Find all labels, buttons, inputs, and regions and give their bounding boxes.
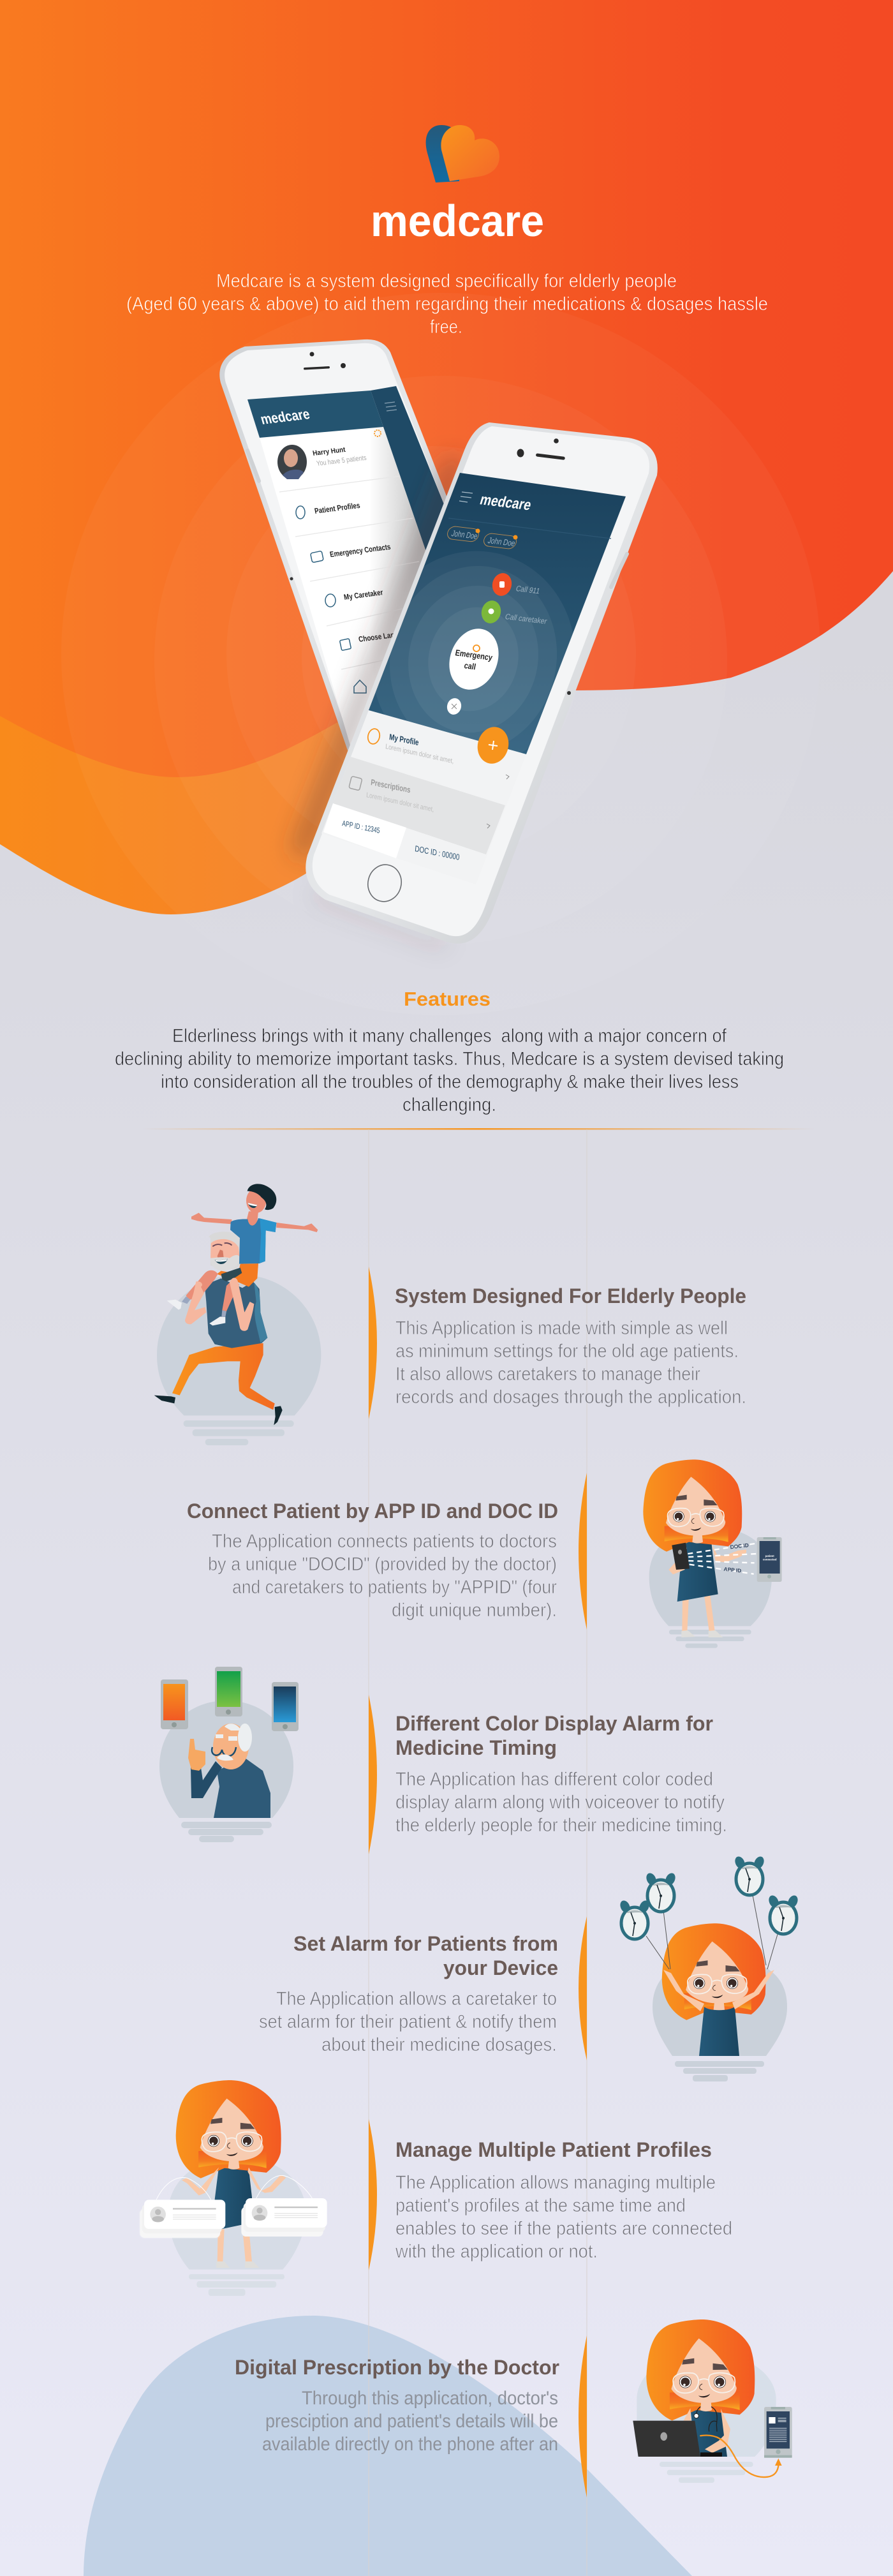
prescriptions row: Prescriptions [371,777,411,794]
alarm clock 2 [644,1872,677,1912]
child back sock and shoe [167,1297,190,1310]
right profile cards [241,2198,327,2237]
feature 5 body: with the application or not. [395,2241,598,2262]
back phone orange badge [374,430,381,436]
raised arms [663,1970,774,2011]
feature 5 body: enables to see if the patients are connected [395,2218,732,2239]
alarm clock 3 [733,1855,766,1895]
child neck [247,1211,258,1227]
back phone menu icons [296,506,366,693]
concentric background rings [61,293,820,1015]
front phone header divider [448,518,611,539]
legs and shoes [681,1595,723,1637]
doc id label: DOC ID : 00000 [415,844,460,862]
front phone camera and speaker [517,438,565,460]
alarm clock 4 [767,1894,800,1934]
body [214,1758,270,1818]
phone [764,2407,792,2458]
target phone: patient [765,1554,774,1558]
app id label: APP ID [723,1566,742,1574]
man legs [172,1343,275,1410]
intro text: Medcare is a system designed specifically for elderly people [216,271,677,292]
intro text: free. [430,316,462,338]
front phone grey row [333,757,505,854]
feature 1 body: It also allows caretakers to manage their [395,1364,700,1385]
feature 5 illustration: girl with profile cards [140,2080,327,2296]
prescriptions row: Lorem ipsum dolor sit amet, [366,791,434,814]
man right arm [230,1277,254,1331]
bulb base [189,2274,284,2296]
feature 4 body [259,1988,557,2055]
feature 3 body: the elderly people for their medicine timing. [395,1815,727,1836]
header: gold wave [0,702,383,914]
my profile row: Lorem ipsum dolor sit amet, [385,743,454,765]
my profile row [366,727,454,765]
features paragraph: Elderliness brings with it many challenges along with a major concern of [172,1025,727,1046]
back phone side button [247,450,259,481]
front phone side button [611,554,627,587]
arrow [700,2435,782,2477]
my profile row: My Profile [389,732,419,747]
bulb backdrop [168,2157,306,2270]
prescriptions row [349,776,434,814]
front phone remaining screen [321,710,526,884]
bulb base [675,2061,764,2081]
feature 3 heading: Medicine Timing [395,1736,557,1759]
child front leg [222,1278,239,1311]
stethoscope [694,2407,717,2432]
dress [699,2007,739,2056]
back phone menu labels: My Caretaker [343,588,384,602]
back phone menu labels: Emergency Contacts [329,542,392,559]
bulb backdrop [159,1701,293,1818]
feature 3 body: The Application has different color coded [395,1769,713,1790]
orange divider [142,1128,815,1129]
left shoulder [684,2408,691,2420]
target phone [757,1537,782,1582]
back phone wordmark: medcare [259,406,311,428]
child back leg [186,1270,218,1300]
emergency call button [441,622,507,697]
left profile cards [140,2200,225,2238]
emergency call button: Emergency [454,648,494,662]
features paragraph: declining ability to memorize important tasks. Thus, Medcare is a system devised taking [115,1048,784,1069]
back phone header [247,391,383,438]
front phone dark screen [369,473,626,754]
front phone patient pills [446,526,518,549]
row chevrons [487,775,509,828]
feature 6 heading: Digital Prescription by the Doctor [235,2356,559,2379]
legs and shoes [216,2227,260,2268]
header: orange gradient shape [0,0,893,777]
feature 4 heading: Set Alarm for Patients from [293,1932,558,1955]
front phone patient pills: John Doe [487,535,517,548]
blue phone [272,1682,299,1731]
feature 2 body [208,1531,557,1621]
bulb base [669,1630,751,1648]
feature 6 body: presciption and patient's details will be [265,2411,558,2432]
head [176,2080,281,2178]
back phone [219,339,459,759]
back phone camera and speaker [304,352,346,370]
feature 2 illustration: girl connecting phones [643,1459,782,1648]
child orange shorts [217,1263,258,1287]
feature 5 body [395,2172,732,2262]
alarm clock 1 [618,1899,651,1939]
feature 2 body: by a unique "DOCID" (provided by the doctor) [208,1554,557,1575]
feature 1 body: as minimum settings for the old age patients. [395,1341,739,1362]
vertical timeline lines [369,1129,587,2576]
feature 1 body [395,1318,746,1408]
strings [156,2175,312,2200]
feature 2 body: and caretakers to patients by "APPID" (four [232,1577,557,1598]
back phone hamburger [385,402,397,411]
feature 3 illustration: old man with phones [159,1667,299,1842]
call caretaker button [479,599,548,626]
dress [690,2407,727,2457]
front phone side dot [567,691,571,695]
front phone [306,422,658,944]
back phone side dot [290,577,293,581]
feature 2 heading: Connect Patient by APP ID and DOC ID [187,1500,558,1523]
feature 4 illustration: girl with alarm clocks [618,1855,800,2081]
bulb backdrop [157,1274,321,1415]
bulb base [184,1420,294,1445]
right arm [712,1544,746,1562]
feature 1 body: This Application is made with simple as well [395,1318,728,1339]
call 911 button: Call 911 [515,584,541,595]
close button [445,697,463,716]
feature 1 body: records and dosages through the application. [395,1387,746,1408]
head [643,1459,742,1552]
head [212,1724,252,1769]
back phone menu labels: Patient Profiles [314,501,361,516]
feature 6 illustration: doctor with laptop and phone [633,2319,792,2483]
child arms [191,1213,318,1232]
man head [209,1232,244,1281]
dress [677,1540,718,1602]
title: medcare [371,196,544,246]
app id label: APP ID : 12345 [342,819,380,835]
back phone profile text: Harry Hunt [312,446,346,458]
front phone patient pills: John Doe [450,528,479,541]
feature 4 heading: your Device [443,1956,558,1979]
arms [182,2168,286,2196]
feature 2 body: digit unique number). [392,1600,557,1621]
held device [672,1543,690,1570]
arm [705,2409,730,2453]
front phone pulse rings [376,551,573,753]
call 911 button [490,571,541,598]
bulb backdrop [653,1958,787,2056]
features paragraph: into consideration all the troubles of the demography & make their lives less [161,1071,739,1092]
green phone [215,1667,242,1716]
shadow of front phone [300,459,456,944]
child shirt side [260,1218,276,1263]
feature 1 heading: System Designed For Elderly People [395,1284,746,1307]
left arm [668,1560,686,1574]
feature 2 body: The Application connects patients to doctors [212,1531,557,1552]
feature 3 body [395,1769,727,1836]
hand [188,1739,205,1771]
bulb base [181,1822,272,1842]
child shirt [230,1218,276,1264]
feature 3 heading [395,1712,713,1759]
back phone: You have 5 patients [316,454,367,468]
feature 4 heading [293,1932,558,1979]
feature 5 body: patient's profiles at the same time and [395,2195,686,2216]
back phone menu labels: Choose Language [358,628,414,644]
add button [474,724,512,767]
orange phone [161,1679,188,1729]
intro text [126,271,768,338]
dress [215,2165,252,2229]
head [662,1923,765,2020]
emergency call button: call [463,660,476,671]
back phone right panel [371,386,447,555]
man left arm [185,1281,206,1324]
feature 5 heading: Manage Multiple Patient Profiles [395,2138,712,2161]
arm [191,1761,222,1798]
front phone wordmark: medcare [478,491,533,513]
front phone hamburger [459,492,473,502]
feature 4 body: The Application allows a caretaker to [276,1988,557,2009]
feature 3 body: display alarm along with voiceover to notify [395,1792,725,1813]
bulb base [660,2462,753,2483]
app id cell [323,803,406,858]
target phone: connected [763,1558,777,1561]
features paragraph: challenging. [402,1094,496,1115]
features paragraph [115,1025,784,1115]
head [646,2319,755,2420]
man shoes [154,1396,283,1425]
features heading: Features [404,988,491,1010]
feature 5 body: The Application allows managing multiple [395,2172,716,2193]
feature 6 body: Through this application, doctor's [302,2388,558,2409]
feature 4 body: about their medicine dosages. [321,2034,557,2055]
back phone menu labels [314,501,414,644]
bulb backdrop [637,2353,776,2457]
feature 3 heading: Different Color Display Alarm for [395,1712,713,1735]
back phone avatar [277,445,307,479]
child front shoe [209,1310,226,1325]
connection dashes [688,1543,758,1574]
intro text: (Aged 60 years & above) to aid them regarding their medications & dosages hassle [126,294,768,315]
back phone row dividers [279,476,419,669]
bottom blue blob [84,2316,692,2576]
call caretaker button: Call caretaker [504,612,548,626]
bulb backdrop [649,1527,772,1626]
feature 1 illustration: man with child [154,1184,321,1445]
balloon strings [646,1895,778,1969]
man shirt side [254,1283,267,1343]
feature 6 body [262,2388,558,2455]
man shirt [205,1278,267,1348]
feature 6 body: available directly on the phone after an [262,2434,558,2455]
feature 4 body: set alarm for their patient & notify them [259,2011,557,2032]
child head [246,1184,276,1213]
laptop [633,2421,722,2457]
logo: heart [426,125,499,182]
home button [364,861,405,905]
doc id label: DOC ID [730,1542,749,1550]
timeline accents [369,1267,587,2498]
back phone screen rows [260,427,459,759]
